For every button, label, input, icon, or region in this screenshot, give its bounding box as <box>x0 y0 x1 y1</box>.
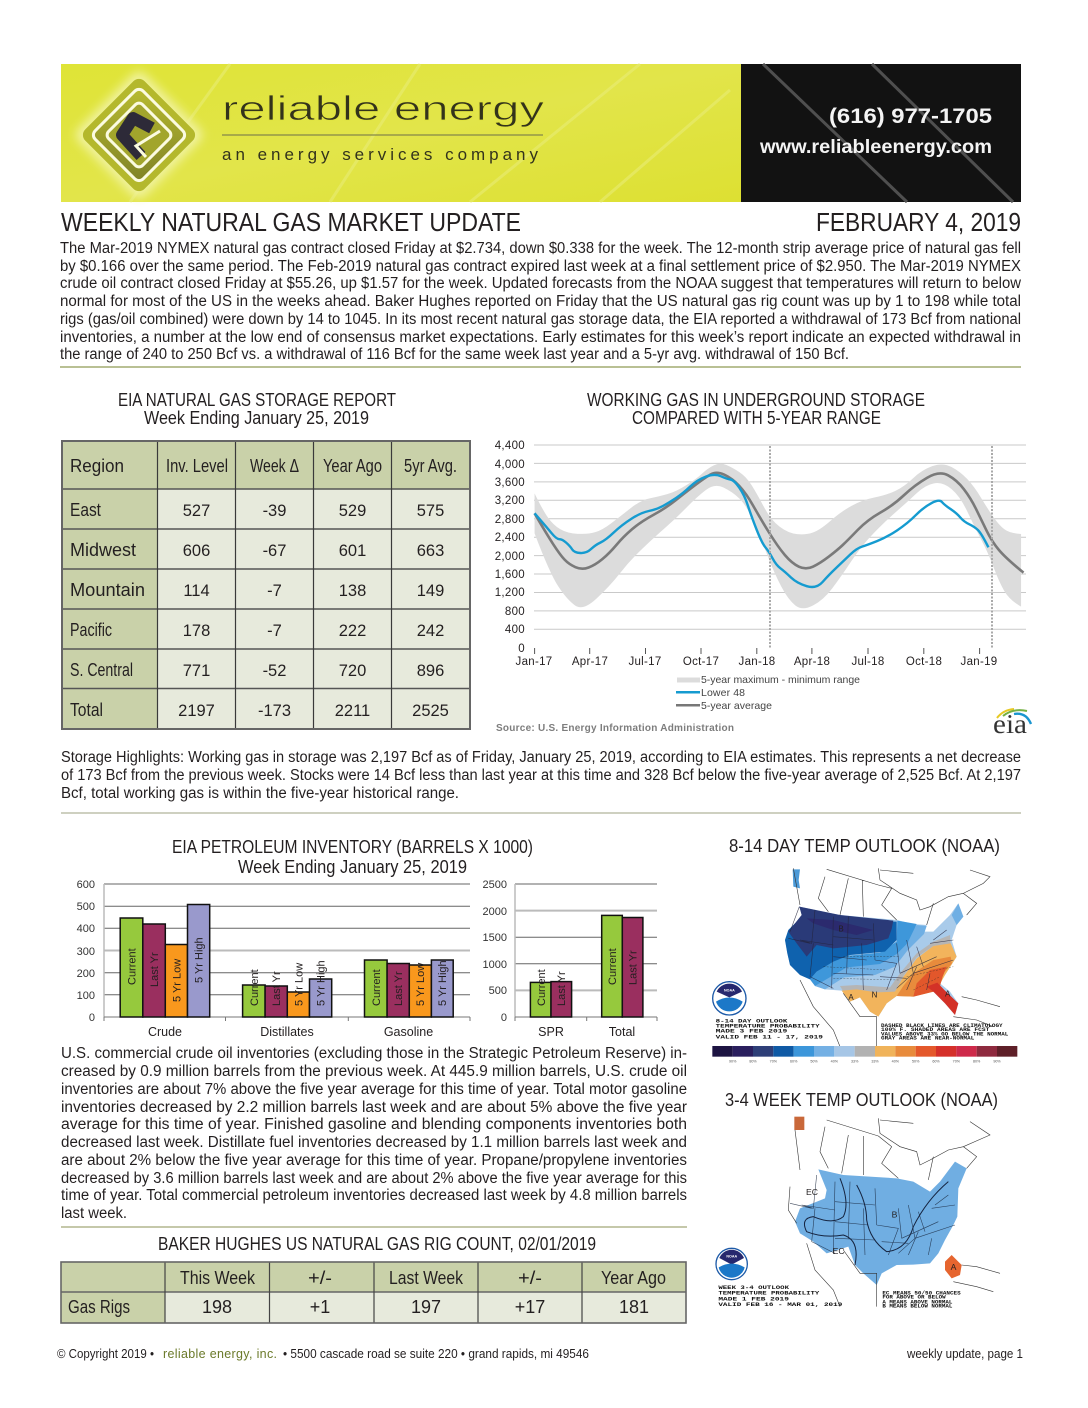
y axis labels: 1,200 <box>495 587 525 599</box>
crude bars <box>120 904 210 1017</box>
bar labels: Last Yr <box>393 971 405 1006</box>
y axis labels: 400 <box>505 624 525 636</box>
probability legend: 33% <box>871 1060 879 1064</box>
icon: NOAA logo <box>716 1248 747 1280</box>
y axis labels: 100 <box>77 990 95 1002</box>
probability legend: 40% <box>831 1060 839 1064</box>
bar labels: Current <box>607 948 619 985</box>
table values: 575 <box>417 502 444 520</box>
bar labels: Last Yr <box>628 950 640 985</box>
market summary text: inventories, a number at the low end of consensus market expectations. Early estimates for this week’s report indicate an expected withdrawal in <box>60 329 1021 346</box>
table values: -67 <box>263 542 286 560</box>
region labels <box>70 500 145 720</box>
chart source: Source: U.S. Energy Information Administration <box>496 723 734 734</box>
storage table heading: Week Ending January 25, 2019 <box>144 408 369 428</box>
rig count table <box>61 1262 686 1323</box>
probability legend: 80% <box>973 1060 981 1064</box>
header banner <box>61 64 741 202</box>
bar labels: 5 Yr Low <box>415 963 427 1006</box>
map letters: EC <box>806 1187 818 1197</box>
bar labels <box>126 937 449 1006</box>
map letters: A <box>945 990 951 999</box>
icon: eia logo: eia <box>993 709 1027 739</box>
probability legend: 80% <box>749 1060 757 1064</box>
probability legend <box>712 1046 1017 1064</box>
table values: 2197 <box>178 702 215 720</box>
market summary text: normal for most of the US in the weeks ahead. Baker Hughes reported on Friday that the US natural gas rig count was up by 1 to 198 while total <box>60 293 1021 310</box>
category labels: Crude <box>148 1025 182 1039</box>
map letters: A <box>848 993 854 1002</box>
x axis labels: Jul-18 <box>851 656 885 668</box>
y axis labels <box>483 879 507 1024</box>
probability legend: 60% <box>790 1060 798 1064</box>
probability legend: 70% <box>770 1060 778 1064</box>
table values: 242 <box>417 622 444 640</box>
probability legend: 90% <box>993 1060 1001 1064</box>
storage table heading <box>118 390 396 428</box>
8-14 day outlook heading: 8-14 DAY TEMP OUTLOOK (NOAA) <box>729 836 1000 856</box>
petroleum inventory heading <box>172 837 533 877</box>
region labels: Midwest <box>70 540 136 560</box>
table header row: Region <box>70 456 124 476</box>
rig table header <box>180 1268 666 1288</box>
bar labels: 5 Yr Low <box>293 963 305 1006</box>
map notes: A MEANS ABOVE NORMAL <box>882 1298 953 1305</box>
petroleum inventory text: creased by 0.9 million barrels from the previous week. At 445.9 million barrels, U.S. crude oil <box>61 1063 687 1080</box>
probability legend: 70% <box>953 1060 961 1064</box>
distillates bars <box>243 979 332 1017</box>
storage highlights text: Bcf, total working gas is within the five-year historical range. <box>61 785 459 802</box>
chart legend: 5-year average <box>701 700 772 712</box>
contact panel <box>741 64 1021 202</box>
footer <box>57 1347 1023 1361</box>
icon: NOAA logo <box>713 982 746 1015</box>
probability legend: 50% <box>810 1060 818 1064</box>
map: 3-4 week temperature outlook <box>716 1117 1000 1310</box>
chart legend <box>676 674 860 712</box>
map caption <box>718 1284 843 1308</box>
petroleum inventory text: time of year. Total commercial petroleum inventories decreased last week by 4.8 million barrels <box>61 1187 687 1204</box>
category labels: Distillates <box>260 1025 314 1039</box>
table values: -7 <box>267 582 282 600</box>
map letters <box>838 925 951 1002</box>
table values: -7 <box>267 622 282 640</box>
bar labels: 5 Yr High <box>316 960 328 1006</box>
icon: NOAA logo: NOAA <box>726 1255 737 1259</box>
category labels: SPR <box>538 1025 564 1039</box>
table values: 527 <box>183 502 210 520</box>
table values: 720 <box>339 662 366 680</box>
category labels: Total <box>609 1025 635 1039</box>
region labels: S. Central <box>70 660 133 680</box>
table values: 138 <box>339 582 366 600</box>
storage highlights text: Storage Highlights: Working gas in storage was 2,197 Bcf as of Friday, January 25, 2019, according to EIA estimates. This represents a net decrease <box>61 749 1021 766</box>
petroleum inventory text: inventories decreased by 2.2 million barrels last week and are about 5% above the five year <box>61 1099 687 1116</box>
table values: -39 <box>263 502 286 520</box>
storage chart heading: COMPARED WITH 5-YEAR RANGE <box>632 408 881 428</box>
climatology lines <box>823 957 953 990</box>
map notes: FOR ABOVE OR BELOW <box>882 1294 946 1301</box>
x axis labels: Apr-18 <box>794 656 830 668</box>
category labels: Gasoline <box>384 1025 433 1039</box>
market summary text: The Mar-2019 NYMEX natural gas contract closed Friday at $2.734, down $0.338 for the week. The 12-month strip average price of natural gas fell <box>60 240 1021 257</box>
table header row: Week Δ <box>250 456 299 476</box>
y axis labels <box>495 440 525 655</box>
footer: © Copyright 2019 • <box>57 1347 154 1361</box>
table values: 663 <box>417 542 444 560</box>
y axis labels: 1500 <box>483 932 507 944</box>
map notes: DASHED BLACK LINES ARE CLIMATOLOGY <box>881 1022 1003 1029</box>
map letters: A <box>951 1262 957 1272</box>
table values: 771 <box>183 662 210 680</box>
probability legend: 60% <box>932 1060 940 1064</box>
bar labels: Last Yr <box>556 971 568 1006</box>
map caption: TEMPERATURE PROBABILITY <box>716 1023 820 1030</box>
working gas line chart <box>495 440 1031 739</box>
probability contours <box>804 1178 948 1265</box>
footer: reliable energy, inc. <box>163 1347 277 1361</box>
map notes: GRAY AREAS ARE NEAR-NORMAL <box>881 1035 975 1042</box>
petroleum inventory heading: Week Ending January 25, 2019 <box>238 857 467 877</box>
map caption: WEEK 3-4 OUTLOOK <box>718 1284 790 1291</box>
market summary text: by $0.166 over the same period. The Feb-2019 natural gas contract expired last week at a final settlement price of $2.950. The Mar-2019 NYMEX <box>60 258 1022 275</box>
y axis labels: 300 <box>77 946 95 958</box>
petroleum inventory text <box>61 1045 687 1222</box>
map caption <box>716 1018 824 1040</box>
storage chart heading: WORKING GAS IN UNDERGROUND STORAGE <box>587 390 925 410</box>
probability legend: 50% <box>912 1060 920 1064</box>
map caption: VALID FEB 16 - MAR 01, 2019 <box>718 1301 843 1308</box>
category labels <box>148 1025 433 1039</box>
map caption: TEMPERATURE PROBABILITY <box>718 1290 820 1297</box>
rig table header: +/- <box>518 1268 542 1288</box>
x axis labels: Oct-18 <box>906 656 942 668</box>
rig table values: Gas Rigs <box>68 1297 130 1317</box>
y axis labels: 2,400 <box>495 532 525 544</box>
gasoline bars <box>364 960 453 1017</box>
map notes: VALUES ABOVE 33% GO BELOW THE NORMAL <box>881 1030 1009 1037</box>
petroleum bar chart: crude, distillates, gasoline <box>77 879 470 1039</box>
region labels: Pacific <box>70 620 112 640</box>
map: 8-14 day temperature outlook <box>712 868 1017 1064</box>
y axis labels: 0 <box>501 1012 507 1024</box>
logo diamond <box>73 69 205 201</box>
y axis labels: 600 <box>77 879 95 891</box>
bar labels: 5 Yr High <box>437 960 449 1006</box>
map notes: B MEANS BELOW NORMAL <box>882 1303 953 1310</box>
date: FEBRUARY 4, 2019 <box>816 207 1021 237</box>
y axis labels: 500 <box>489 985 507 997</box>
rig table values: +17 <box>515 1297 545 1317</box>
temperature regions <box>785 869 963 1017</box>
y axis labels: 0 <box>518 643 525 655</box>
y axis labels: 800 <box>505 606 525 618</box>
table values: -52 <box>263 662 286 680</box>
map letters: N <box>872 990 878 999</box>
market summary text: crude oil contract closed Friday at $55.26, up $1.57 for the week. Updated forecasts from the NOAA suggest that temperatures will return to below <box>60 275 1022 292</box>
storage chart heading <box>587 390 925 428</box>
petroleum inventory text: average for this time of year. Finished gasoline and blending components inventories both <box>61 1116 687 1133</box>
rig count heading: BAKER HUGHES US NATURAL GAS RIG COUNT, 02/01/2019 <box>158 1234 596 1254</box>
map letters <box>806 1187 957 1272</box>
map letters: B <box>838 925 844 934</box>
bar labels: Current <box>126 948 138 985</box>
y axis labels: 3,200 <box>495 495 525 507</box>
y axis labels: 2500 <box>483 879 507 891</box>
storage table <box>62 441 470 729</box>
probability legend: 40% <box>892 1060 900 1064</box>
y axis labels: 0 <box>89 1012 95 1024</box>
table header row: Inv. Level <box>166 456 228 476</box>
table values: 2525 <box>412 702 449 720</box>
website: www.reliableenergy.com <box>759 137 992 158</box>
rig table values: 181 <box>619 1297 649 1317</box>
y axis labels: 4,400 <box>495 440 525 452</box>
bar labels: Last Yr <box>271 971 283 1006</box>
x axis labels: Apr-17 <box>572 656 608 668</box>
chart legend: Lower 48 <box>701 687 745 699</box>
category labels <box>538 1025 635 1039</box>
storage highlights text <box>61 749 1021 802</box>
rig table header: Year Ago <box>601 1268 666 1288</box>
table values: 178 <box>183 622 210 640</box>
storage table heading: EIA NATURAL GAS STORAGE REPORT <box>118 390 396 410</box>
rig table values: 198 <box>202 1297 232 1317</box>
market summary text: rigs (gas/oil combined) were down by 14 to 1045. In its most recent natural gas storage data, the EIA reported a withdrawal of 173 Bcf from national <box>60 311 1021 328</box>
table values: 2211 <box>335 702 370 720</box>
table values: 222 <box>339 622 366 640</box>
map caption: MADE 3 FEB 2019 <box>716 1028 788 1035</box>
x axis labels: Jul-17 <box>628 656 662 668</box>
y axis labels: 2,800 <box>495 514 525 526</box>
table values: 114 <box>183 582 210 600</box>
rig table header: Last Week <box>389 1268 464 1288</box>
table values: 601 <box>339 542 366 560</box>
SPR and total bars <box>530 915 643 1017</box>
petroleum inventory text: inventories are about 7% above the five year average for this time of year. Total motor gasoline <box>61 1081 687 1098</box>
region labels: Total <box>70 700 103 720</box>
table values: 896 <box>417 662 444 680</box>
y axis labels: 2000 <box>483 906 507 918</box>
x axis labels <box>516 656 997 668</box>
table values: 149 <box>417 582 444 600</box>
x axis labels: Jan-18 <box>739 656 775 668</box>
x axis labels: Jan-17 <box>516 656 552 668</box>
map caption: MADE 1 FEB 2019 <box>718 1295 790 1302</box>
map caption: 8-14 DAY OUTLOOK <box>716 1018 788 1025</box>
market summary text <box>60 240 1022 363</box>
y axis labels: 3,600 <box>495 477 525 489</box>
3-4 week outlook heading: 3-4 WEEK TEMP OUTLOOK (NOAA) <box>725 1090 998 1110</box>
y axis labels <box>77 879 95 1024</box>
table values: 606 <box>183 542 210 560</box>
y axis labels: 400 <box>77 923 95 935</box>
y axis labels: 1,600 <box>495 569 525 581</box>
5-year range and series <box>535 464 1024 608</box>
chart legend: 5-year maximum - minimum range <box>701 674 860 686</box>
footer: weekly update, page 1 <box>906 1347 1023 1361</box>
table values <box>178 502 449 720</box>
x axis labels: Oct-17 <box>683 656 719 668</box>
petroleum inventory text: last week. <box>61 1205 127 1222</box>
petroleum inventory text: are about 2% below the five year average for this time of year. Propane/propylene inventories <box>61 1152 687 1169</box>
icon: NOAA logo: NOAA <box>724 988 735 992</box>
map notes <box>882 1289 961 1310</box>
table header row: 5yr Avg. <box>404 456 457 476</box>
petroleum inventory text: decreased last week. Distillate fuel inventories decreased by 1.1 million barrels last week and <box>61 1134 687 1151</box>
map notes <box>881 1022 1009 1042</box>
bar labels: Current <box>371 969 383 1006</box>
petroleum inventory text: decreased by 3.6 million barrels last week and are about 2% above the five year average for this <box>61 1170 687 1187</box>
map letters: EC <box>833 1246 845 1256</box>
table values: -173 <box>258 702 291 720</box>
title: WEEKLY NATURAL GAS MARKET UPDATE <box>61 207 521 237</box>
y axis labels: 200 <box>77 968 95 980</box>
region labels: East <box>70 500 101 520</box>
rig table values: +1 <box>310 1297 330 1317</box>
table header row: Year Ago <box>323 456 382 476</box>
map notes: 100% F. SHADED AREAS ARE FCST <box>881 1026 990 1033</box>
y axis labels: 500 <box>77 901 95 913</box>
rig table values: 197 <box>411 1297 441 1317</box>
bar labels: Current <box>536 969 548 1006</box>
map caption: VALID FEB 11 - 17, 2019 <box>716 1033 824 1040</box>
map letters: B <box>892 1209 898 1219</box>
x axis labels: Jan-19 <box>961 656 997 668</box>
y axis labels: 4,000 <box>495 459 525 471</box>
state and border lines <box>790 1175 955 1255</box>
probability legend: 90% <box>729 1060 737 1064</box>
bar labels: 5 Yr High <box>194 937 206 983</box>
footer: • 5500 cascade road se suite 220 • grand rapids, mi 49546 <box>283 1347 589 1361</box>
bar labels <box>536 948 640 1006</box>
state and border lines <box>788 907 953 990</box>
petroleum inventory text: U.S. commercial crude oil inventories (excluding those in the Strategic Petroleum Reserve) in- <box>61 1045 687 1062</box>
rig table values <box>68 1297 649 1317</box>
temperature regions <box>794 1117 967 1285</box>
phone: (616) 977-1705 <box>829 105 992 128</box>
y axis labels: 2,000 <box>495 551 525 563</box>
probability legend: 33% <box>851 1060 859 1064</box>
map notes: EC MEANS 50/50 CHANCES <box>882 1289 961 1296</box>
tagline: an energy services company <box>222 145 538 164</box>
rig table header: This Week <box>180 1268 256 1288</box>
bar labels: Current <box>249 969 261 1006</box>
table header row <box>70 456 457 476</box>
table values: 529 <box>339 502 366 520</box>
petroleum bar chart: SPR and total <box>483 879 657 1039</box>
y axis labels: 1000 <box>483 959 507 971</box>
bar labels: 5 Yr Low <box>171 959 183 1002</box>
market summary text: the range of 240 to 250 Bcf vs. a withdrawal of 116 Bcf for the same week last year and a 5-yr avg. withdrawal of 150 Bcf. <box>60 346 849 363</box>
bar labels: Last Yr <box>149 952 161 987</box>
storage highlights text: of 173 Bcf from the previous week. Stocks were 14 Bcf less than last year at this time and 328 Bcf below the five-year average of 2,525 Bcf. At 2,197 <box>61 767 1021 784</box>
petroleum inventory heading: EIA PETROLEUM INVENTORY (BARRELS X 1000) <box>172 837 533 857</box>
brand name: reliable energy <box>222 90 544 128</box>
rig table header: +/- <box>308 1268 332 1288</box>
region labels: Mountain <box>70 580 145 600</box>
